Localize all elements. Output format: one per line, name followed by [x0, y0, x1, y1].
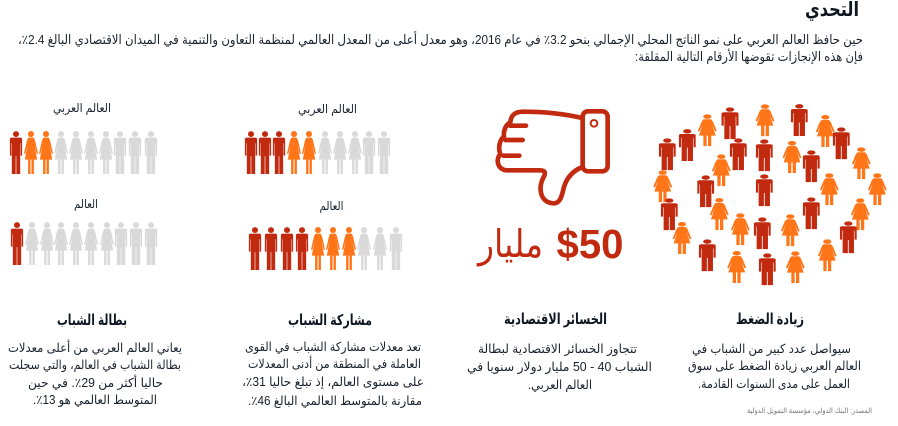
text block: youth unemployment — [8, 312, 182, 408]
panel: youth unemployment chart — [10, 101, 157, 265]
intro text: حين حافظ العالم العربي على نمو الناتج المحلي الإجمالي بنحو 3.2‏٪ في عام 2016، وهو معدل أعلى من المعدل العالمي لمنظمة التعاون والتنمية في الميدان الاقتصادي البالغ 2.4‏٪، — [18, 31, 863, 48]
text block: increased pressure — [688, 311, 861, 392]
figure: 50 billion dollars: مليار — [476, 224, 543, 266]
panel: youth participation chart — [245, 102, 402, 270]
figure: 50 billion dollars: $50 — [556, 221, 624, 267]
body: youth participation: مقارنة بالمتوسط العالمي البالغ 46‏٪. — [248, 394, 422, 409]
body: youth participation — [242, 340, 424, 409]
pictogram: crowd of youth forming an eye — [653, 104, 887, 285]
body: youth unemployment — [8, 339, 182, 408]
text block: youth participation — [242, 312, 424, 409]
heading: economic losses: الخسائر الاقتصادية — [504, 311, 607, 328]
body: economic losses: العالم العربي. — [528, 378, 592, 393]
heading: increased pressure: زيادة الضغط — [736, 311, 804, 328]
pictogram row: Arab world participation — [245, 131, 390, 174]
label: world: العالم — [320, 199, 344, 213]
body: youth participation: تعد معدلات مشاركة الشباب في القوى — [245, 340, 421, 355]
intro text: فإن هذه الإنجازات تقوضها الأرقام التالية المقلقة: — [635, 48, 863, 65]
icon: thumbs down — [498, 111, 608, 203]
body: economic losses — [467, 342, 652, 393]
label: Arab world: العالم العربي — [53, 101, 111, 116]
pictogram row: world participation — [249, 227, 402, 270]
text block: economic losses — [467, 311, 652, 393]
body: increased pressure — [688, 342, 861, 392]
heading: youth participation: مشاركة الشباب — [288, 312, 372, 329]
label: Arab world: العالم العربي — [298, 102, 357, 117]
body: youth unemployment: المتوسط العالمي هو 13‏٪. — [33, 393, 157, 408]
body: youth participation: على مستوى العالم، إذ تبلغ حاليا 31‏٪، — [242, 375, 424, 390]
body: economic losses: الشباب 40 - 50 مليار دولار سنويا في — [467, 360, 652, 375]
body: increased pressure: سيواصل عدد كبير من الشباب في — [692, 342, 851, 357]
heading: youth unemployment: بطالة الشباب — [57, 312, 127, 329]
body: youth unemployment: بطالة الشباب في العالم، والتي سجلت — [9, 358, 181, 373]
body: increased pressure: العالم العربي زيادة الضغط على سوق — [688, 359, 861, 374]
intro text — [18, 31, 863, 65]
body: youth unemployment: يعاني العالم العربي من أعلى معدلات — [8, 339, 182, 356]
body: increased pressure: العمل على مدى السنوات القادمة. — [698, 377, 850, 392]
body: youth participation: العاملة في المنطقة من أدنى المعدلات — [248, 355, 421, 372]
figure: 50 billion dollars — [476, 221, 624, 267]
pictogram row: Arab world unemployment — [10, 131, 157, 174]
source note: المصدر: البنك الدولي، مؤسسة التمويل الدولية — [747, 406, 872, 415]
body: economic losses: تتجاوز الخسائر الاقتصادية لبطالة — [478, 342, 637, 357]
pictogram row: world unemployment — [11, 222, 157, 265]
label: world: العالم — [74, 197, 98, 211]
body: youth unemployment: حاليا أكثر من 29‏٪. في حين — [28, 374, 163, 391]
